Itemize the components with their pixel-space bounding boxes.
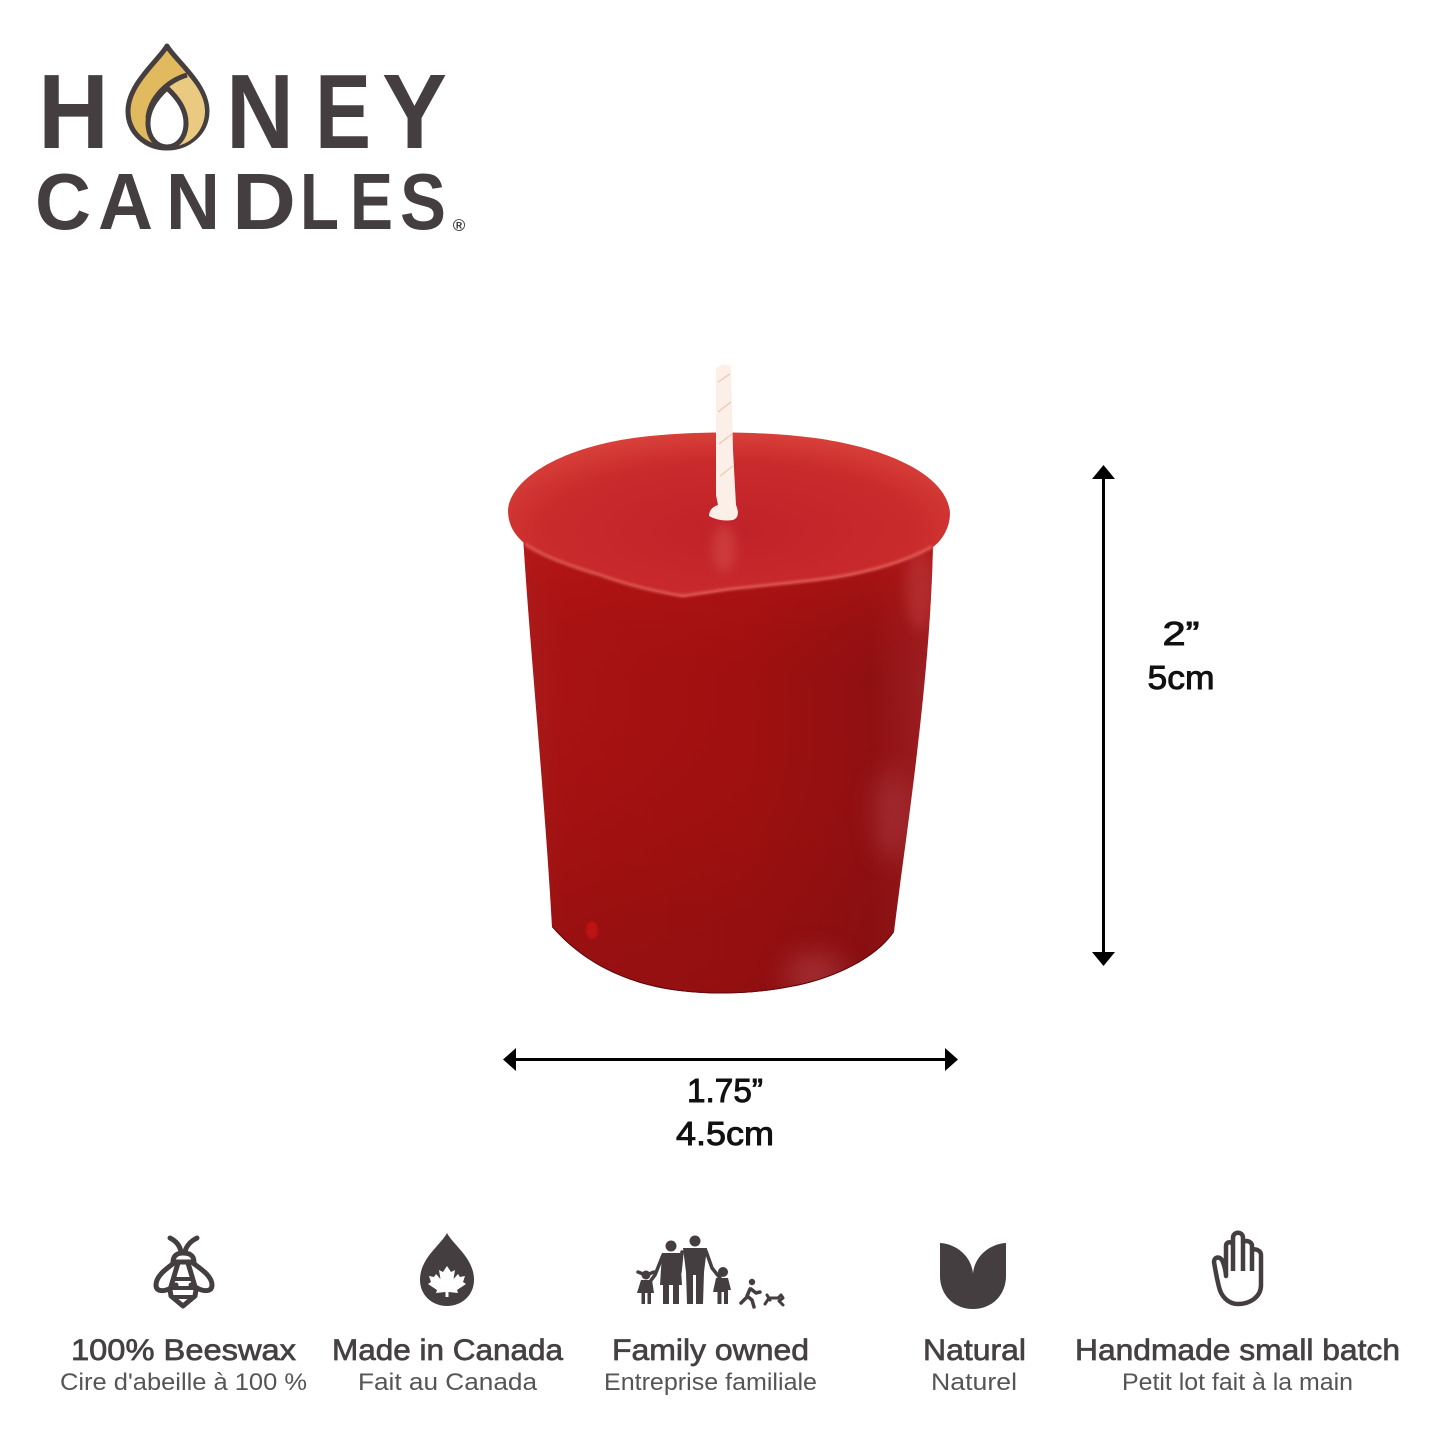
logo word: CANDLES: N	[166, 157, 220, 246]
logo word: CANDLES: D	[232, 157, 296, 246]
logo word: CANDLES: C	[35, 157, 91, 246]
height label: 2”	[1162, 615, 1200, 652]
French label: Cire d'abeille à 100 %	[60, 1369, 307, 1396]
label: Made in Canada	[332, 1334, 563, 1367]
candle body	[523, 535, 933, 994]
French label: Entreprise familiale	[604, 1369, 817, 1396]
logo word: HONEY: Y	[382, 53, 447, 171]
logo word: CANDLES: A	[98, 157, 153, 246]
rim highlight	[525, 544, 932, 596]
logo word: CANDLES: E	[350, 157, 393, 246]
label: Natural	[923, 1334, 1026, 1367]
feature: 100% Beeswax	[60, 1238, 307, 1396]
icon: family	[637, 1236, 783, 1307]
feature: Family owned	[604, 1236, 817, 1396]
French label: Petit lot fait à la main	[1122, 1369, 1353, 1396]
height label: 5cm	[1148, 659, 1214, 696]
logo word: CANDLES: L	[300, 157, 339, 246]
icon: tulip leaf	[940, 1243, 1006, 1309]
logo flame icon	[128, 46, 207, 148]
width arrow	[503, 1048, 958, 1071]
width label	[676, 1072, 774, 1152]
icon: bee	[156, 1238, 212, 1306]
height label	[1148, 615, 1214, 696]
wick reflection	[713, 524, 735, 572]
logo: Honey Candles	[35, 46, 466, 246]
wick	[709, 365, 738, 520]
French label: Naturel	[931, 1369, 1017, 1396]
candle shading	[524, 542, 933, 994]
candle photo	[500, 365, 960, 1000]
height arrow	[1092, 465, 1115, 966]
candle top	[508, 432, 950, 597]
label: 100% Beeswax	[71, 1334, 296, 1367]
feature: Made in Canada	[332, 1233, 563, 1396]
French label: Fait au Canada	[358, 1369, 538, 1396]
feature: Handmade small batch	[1075, 1233, 1400, 1396]
logo word: HONEY	[38, 53, 447, 171]
label: Family owned	[612, 1334, 809, 1367]
width label: 4.5cm	[676, 1115, 774, 1152]
icon: drop with maple leaf	[420, 1233, 474, 1306]
label: Handmade small batch	[1075, 1334, 1400, 1367]
width label: 1.75”	[687, 1072, 763, 1109]
logo word: HONEY: H	[38, 53, 109, 171]
logo word: CANDLES: S	[400, 157, 446, 246]
logo word: HONEY: E	[315, 53, 371, 171]
registered mark: ®	[453, 216, 466, 235]
icon: hand	[1214, 1233, 1261, 1304]
logo word: HONEY: N	[226, 53, 294, 171]
logo word: CANDLES	[35, 157, 446, 246]
feature: Natural	[923, 1243, 1026, 1396]
